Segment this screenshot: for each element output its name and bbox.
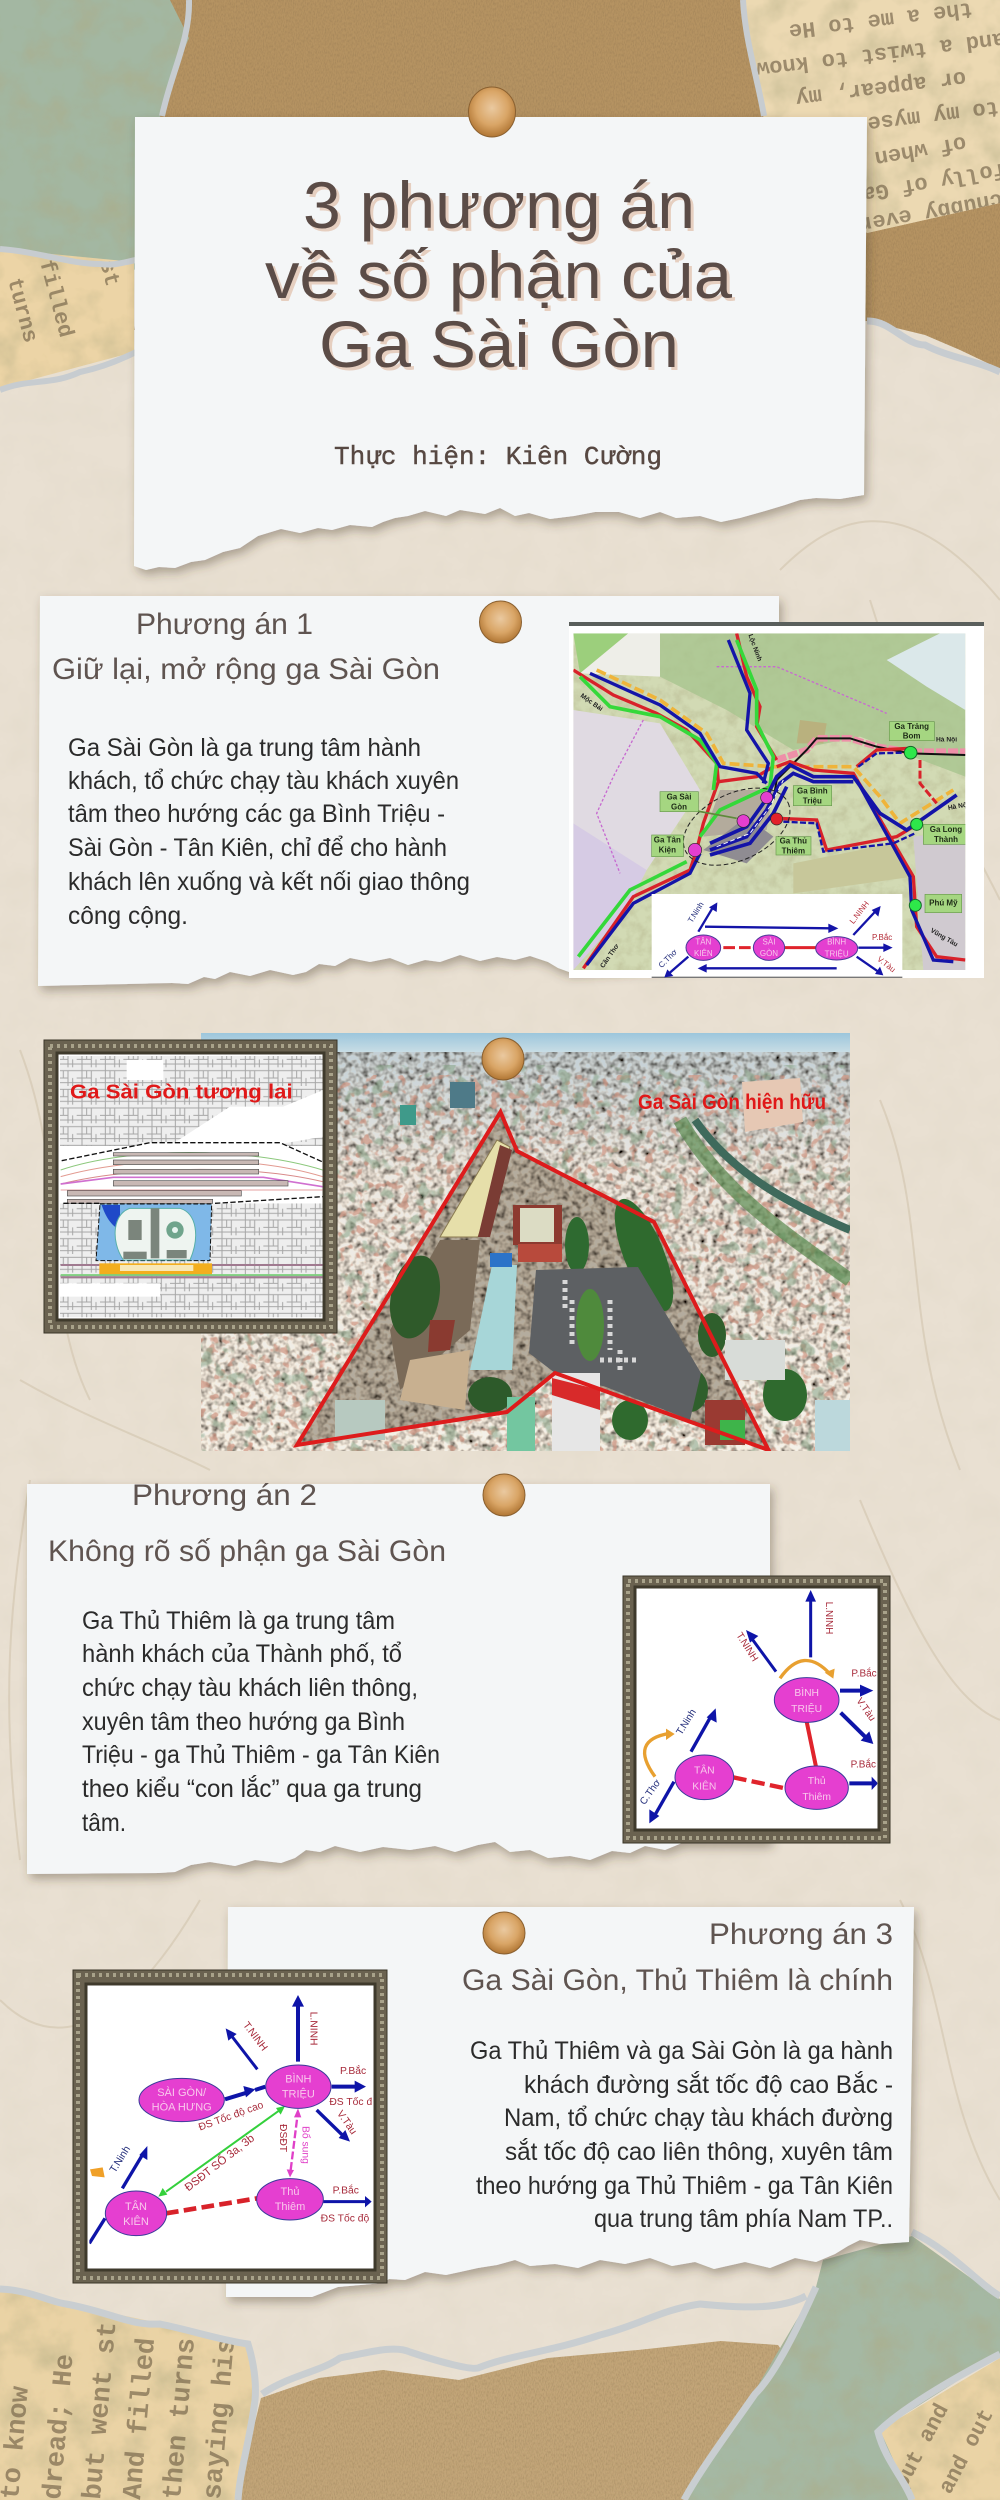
map inset: schematic: V.Tàu [875, 954, 897, 974]
body text: phương án 3: Nam, tổ chức chạy tàu khách đường [504, 2104, 893, 2132]
framed diagram: phương án 3: ĐS Tốc độ [329, 2096, 378, 2108]
station canopy [440, 1140, 510, 1237]
map: railway routes: Kiện [659, 846, 676, 855]
newspaper scrap, bottom left: saying his [199, 2337, 243, 2500]
pin: photo [482, 1038, 524, 1080]
torn rims, bottom [0, 2232, 1000, 2500]
framed diagram: phương án 2: Thiêm [802, 1792, 831, 1803]
brown kraft paper, top [134, 0, 1000, 369]
map: railway routes: Ga Trảng [894, 722, 929, 731]
body text: phương án 1 [68, 734, 470, 930]
framed diagram: phương án 3: V.Tàu [334, 2109, 359, 2137]
map: railway routes: Ga Bình [797, 786, 828, 795]
newspaper scrap, left: st [93, 257, 124, 289]
pin: phương án 2 [483, 1474, 525, 1516]
body text: phương án 2 [82, 1607, 440, 1837]
newspaper scrap, top right: and a twist to know [754, 26, 1000, 81]
framed diagram: phương án 3: T.NINH [240, 2020, 269, 2053]
map: railway routes: Vũng Tàu [929, 927, 959, 949]
canal [695, 1120, 850, 1230]
map: railway routes: Ga Sài [667, 792, 691, 801]
newspaper scrap, bottom left [0, 2291, 255, 2500]
body text: phương án 1: Ga Sài Gòn là ga trung tâm hành [68, 734, 421, 762]
newspaper scrap, bottom right: put and [889, 2400, 955, 2493]
newspaper scrap, bottom right [880, 2358, 1000, 2500]
torn paper collage: top [0, 0, 1000, 390]
body text: phương án 2: Ga Thủ Thiêm là ga trung tâm [82, 1607, 395, 1635]
heading: phương án 2: Phương án 2 [132, 1479, 317, 1512]
map inset: schematic: T.Ninh [686, 900, 706, 924]
map inset: schematic: P.Bắc [872, 933, 892, 942]
framed diagram: phương án 2: TRIỆU [791, 1702, 822, 1715]
body text: phương án 3: theo hướng ga Thủ Thiêm - ga Tân Kiên [476, 2172, 893, 2200]
label: Ga Sài Gòn hiện hữu: Ga Sài Gòn hiện hữu [638, 1091, 826, 1114]
station building [513, 1205, 562, 1262]
map: railway routes [569, 622, 984, 978]
map: railway routes: Cần Thơ [598, 942, 621, 969]
newspaper scrap, top right: to my myself; Y wi [761, 95, 1000, 148]
torn white paper [38, 596, 779, 986]
framed diagram: phương án 3: TÂN [125, 2200, 147, 2213]
heading: phương án 2: Không rõ số phận ga Sài Gòn [48, 1535, 446, 1568]
pin: title [468, 87, 516, 137]
title: về số phận của [265, 238, 732, 312]
newspaper scrap, bottom right: and out [934, 2405, 1000, 2498]
body text: phương án 3: khách đường sắt tốc độ cao Bắc - [524, 2070, 893, 2099]
long concourse roof [470, 1265, 517, 1370]
foreground buildings [507, 1397, 535, 1451]
framed diagram: phương án 2 [623, 1576, 890, 1843]
map inset: schematic: GÒN [760, 949, 778, 958]
newspaper scrap, top right [743, 0, 1000, 236]
torn white paper [134, 117, 867, 570]
framed plan: Ga Sài Gòn tương lai: Ga Sài Gòn tương lai [70, 1080, 293, 1103]
heading: phương án 1: Giữ lại, mở rộng ga Sài Gòn [52, 653, 440, 686]
body text: phương án 3: sắt tốc độ cao liên thông, xuyên tâm [505, 2137, 893, 2166]
map: railway routes: Hà Nội [947, 801, 970, 812]
map: railway routes: Mộc Bài [579, 693, 604, 713]
body text: phương án 1: công cộng. [68, 902, 188, 930]
framed diagram: phương án 3: KIÊN [123, 2215, 149, 2228]
body text: phương án 2: xuyên tâm theo hướng ga Bình [82, 1708, 405, 1736]
map inset: schematic: TRIỆU [825, 950, 849, 959]
body text: phương án 1: Sài Gòn - Tân Kiên, chỉ để cho hành [68, 834, 447, 862]
newspaper scrap, left [0, 249, 134, 388]
body text: phương án 2: hành khách của Thành phố, tổ [82, 1640, 402, 1668]
map: railway routes: Ga Tân [654, 836, 681, 845]
title: về số phận của [268, 241, 735, 315]
framed diagram: phương án 3: ĐS Tốc độ [321, 2212, 370, 2224]
newspaper scrap, left: turns [1, 275, 42, 346]
title: Ga Sài Gòn [322, 310, 682, 384]
map: railway routes: Ga Thủ [780, 836, 807, 845]
torn rim, left [0, 0, 764, 390]
map: railway routes: Phú Mỹ [929, 898, 958, 907]
high-rise towers [742, 1078, 803, 1132]
framed diagram: phương án 2: V.Tàu [854, 1696, 877, 1723]
newspaper scrap, top right: or appear, my [794, 65, 967, 110]
framed diagram: phương án 3: SÀI GÒN/ [157, 2086, 207, 2099]
map: railway routes: Gòn [671, 802, 687, 811]
body text: phương án 2: tâm. [82, 1809, 126, 1837]
heading: phương án 2 [48, 1479, 446, 1568]
parking lot [529, 1267, 701, 1420]
framed diagram: phương án 2: C.Thơ [638, 1777, 664, 1807]
green torn paper, bottom right [686, 2236, 1000, 2500]
map: railway routes: Bom [903, 732, 921, 741]
framed diagram: phương án 3: ĐS Tốc độ cao [197, 2099, 265, 2133]
orange band [99, 1263, 212, 1275]
map inset: schematic: KIÊN [694, 949, 713, 958]
green torn paper, top left [0, 0, 189, 270]
framed diagram: phương án 2: KIÊN [692, 1779, 716, 1792]
framed diagram: phương án 2: TÂN [694, 1763, 715, 1776]
heading: phương án 3: Phương án 3 [709, 1918, 893, 1951]
map: railway routes: Lộc Ninh [746, 633, 763, 662]
aerial photo: Ga Sài Gòn hiện hữu [201, 1033, 850, 1452]
blue plaza [96, 1204, 212, 1261]
rail yard and trees [297, 1112, 768, 1450]
newspaper scrap, bottom left: And filled [119, 2337, 163, 2500]
body text: phương án 3: qua trung tâm phía Nam TP.. [594, 2205, 893, 2233]
framed diagram: phương án 3: ĐSĐT [277, 2124, 288, 2153]
panel: phương án 1 [38, 596, 984, 986]
framed diagram: phương án 2: BÌNH [794, 1686, 819, 1699]
framed diagram: phương án 3: TRIỆU [282, 2087, 315, 2100]
torn white paper [27, 1484, 770, 1874]
map: railway routes: Thiêm [782, 846, 805, 855]
panel: phương án 3 [226, 1907, 914, 2297]
map: railway routes: Hà Nội [936, 737, 957, 744]
framed diagram: phương án 2: T.Ninh [675, 1707, 699, 1737]
framed diagram: phương án 2: L.NINH [823, 1602, 834, 1634]
body text: phương án 2: theo kiểu “con lắc” qua ga trung [82, 1774, 422, 1803]
body text: phương án 2: Triệu - ga Thủ Thiêm - ga Tân Kiên [82, 1741, 440, 1769]
heading: phương án 3 [462, 1918, 893, 1997]
framed diagram: phương án 3: L.NINH [308, 2012, 319, 2046]
framed diagram: phương án 2: P.Bắc [851, 1667, 877, 1680]
map: railway routes: Ga Long [930, 825, 962, 834]
pin: phương án 3 [483, 1912, 525, 1954]
body text: phương án 3: Ga Thủ Thiêm và ga Sài Gòn là ga hành [470, 2037, 893, 2065]
framed diagram: phương án 2: Thủ [808, 1775, 826, 1787]
newspaper scrap, left: filled [33, 257, 78, 340]
framed diagram: phương án 3 [73, 1970, 387, 2283]
framed diagram: phương án 3: T.Ninh [108, 2144, 133, 2175]
map inset: schematic: L.NINH [848, 899, 871, 926]
newspaper scrap, bottom left: but went st [79, 2321, 124, 2500]
framed diagram: phương án 3: P.Bắc [333, 2183, 359, 2196]
torn paper collage: bottom [0, 2232, 1000, 2500]
body text: phương án 1: khách lên xuống và kết nối giao thông [68, 868, 470, 896]
pin: phương án 1 [480, 601, 522, 643]
title: 3 phương án [303, 168, 695, 242]
byline: Thực hiện: Kiên Cường [334, 442, 662, 472]
map: railway routes: Thành [934, 835, 958, 844]
map inset: schematic [652, 894, 902, 977]
panel: phương án 2 [27, 1479, 770, 1874]
title [265, 168, 735, 384]
red boundary of the station [297, 1112, 768, 1450]
map inset: schematic: SÀI [763, 938, 775, 947]
framed diagram: phương án 2: P.Bắc [851, 1757, 876, 1770]
title: 3 phương án [306, 171, 698, 245]
framed diagram: phương án 3: Bổ sung [300, 2126, 312, 2164]
framed diagram: phương án 2: T.NINH [733, 1631, 760, 1664]
brown kraft paper, bottom [236, 2341, 816, 2500]
torn white paper [226, 1907, 914, 2297]
map inset: schematic: BÌNH [827, 938, 846, 947]
map inset: schematic: C.Thơ [657, 947, 679, 970]
body text: phương án 3 [470, 2037, 893, 2233]
newspaper scrap, bottom left: then turns [159, 2337, 203, 2500]
body text: phương án 1: tâm theo hướng các ga Bình Triệu - [68, 800, 445, 828]
map inset: schematic: TÂN [695, 938, 712, 947]
framed diagram: phương án 3: ĐSĐT SỐ 3a, 3b [182, 2131, 257, 2194]
framed diagram: phương án 3: Thiêm [275, 2201, 305, 2213]
framed plan: Ga Sài Gòn tương lai [44, 1040, 337, 1333]
title: Ga Sài Gòn [319, 307, 679, 381]
heading: phương án 1 [52, 608, 440, 686]
framed diagram: phương án 3: HÒA HƯNG [152, 2101, 212, 2114]
body text: phương án 2: chức chạy tàu khách liên thông, [82, 1674, 418, 1702]
newspaper scrap, top right: of when to [834, 130, 968, 177]
title note [134, 117, 867, 570]
heading: phương án 3: Ga Sài Gòn, Thủ Thiêm là chính [462, 1964, 893, 1997]
torn rim, right [867, 321, 1000, 372]
framed diagram: phương án 3: BÌNH [285, 2073, 312, 2086]
framed diagram: phương án 3: P.Bắc [340, 2064, 366, 2077]
heading: phương án 1: Phương án 1 [136, 608, 313, 641]
map: railway routes: Triệu [803, 796, 822, 805]
newspaper scrap, bottom left: dread; He [39, 2353, 82, 2500]
framed diagram: phương án 3: Thủ [281, 2186, 299, 2198]
body text: phương án 1: khách, tổ chức chạy tàu khách xuyên [68, 767, 459, 795]
